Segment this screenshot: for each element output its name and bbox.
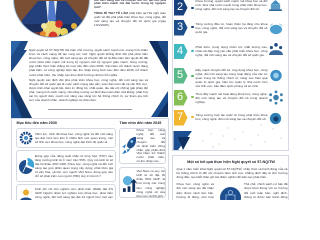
text: vision 1: chuyển đổi: [136, 140, 165, 144]
icon: network nodes: [269, 90, 283, 104]
icon: globe network: [270, 70, 282, 82]
icon: building: [269, 0, 282, 11]
text: vision 1: có thu nhập cao.: [136, 159, 159, 163]
banner: dotted decoration: [174, 124, 282, 150]
text: vision 2: khu vực và thế giới.: [136, 194, 164, 198]
text: goal 1: Tiềm lực, trình độ khoa học, công nghệ và đổi mới sáng tạo đạt mức tiên tiến ở nhiều lĩnh vực quan trọng, một số lĩnh vực khoa học, công nghệ đạt trình độ quốc tế.: [35, 132, 113, 144]
heading: vision to 2045: Tầm nhìn đến năm 2045: [120, 121, 161, 125]
text: vision 2: tâm công nghiệp: [136, 186, 165, 190]
icon: gear: [20, 132, 32, 144]
text: vision 2: công nghệ số của: [136, 190, 165, 194]
text: item 5: Đẩy mạnh chuyển đổi số, ứng dụng khoa học, công nghệ, đổi mới sáng tạo trong hoạt động của các cơ quan trong hệ thống chính trị; nâng cao hiệu quả quản trị quốc gia, hiệu lực quản lý nhà nước trên các lĩnh vực, bảo đảm quốc phòng và an ninh.: [196, 68, 268, 88]
item 4: [174, 43, 283, 59]
text: results intro: Qua 1 năm triển khai Nghị quyết số 57-NQ/TW, nhận thức và hành động của cả hệ thống chính trị đối với chuyển biến tích cực, khẳng định đây là chủ trương đúng đắn, tạo khởi thảo gỡ các điểm nghẽn để kiến tạo phát triển.: [176, 166, 288, 179]
text: vision 1: chắc, góp phần đưa: [136, 148, 165, 152]
text: vision 2: kinh tế số đạt tối: [136, 173, 165, 177]
panel: seven key tasks: [172, 0, 289, 150]
decoration: left blue triangles: [11, 41, 32, 118]
text: item 6: Thúc đẩy mạnh mẽ hoạt động khoa học, công nghệ, đổi mới sáng tạo và chuyển đổi số trong doanh nghiệp.: [196, 92, 268, 104]
card: vision 1: [119, 128, 166, 164]
decoration: right blue triangles: [149, 41, 168, 117]
item 4: 4: [177, 44, 183, 56]
panel: results of implementing the resolution: [172, 154, 289, 204]
heading: results: Một số kết quả thực hiện Nghị quyết số 57-NQ/TW: [187, 160, 275, 164]
icon: growth chart: [122, 176, 137, 192]
item 5: 5: [177, 69, 183, 81]
text: item 7: Tăng cường hợp tác quốc tế trong phát triển khoa học, công nghệ, đổi mới sáng tạo và chuyển đổi số.: [196, 113, 268, 121]
text: item 4: Phát triển, trọng dụng nhân lực chất lượng cao, nhân tài đáp ứng yêu cầu phát triển khoa học, công nghệ, đổi mới sáng tạo và chuyển đổi số quốc gia.: [196, 44, 268, 57]
item 6: [174, 90, 283, 106]
icon: central blue circle: [220, 187, 241, 200]
text: vision 2: Việt Nam có quy mô: [136, 169, 165, 173]
icon: cloud: [270, 24, 282, 34]
text: vision 2: một trong các trung: [136, 181, 165, 185]
card: vision 3: [119, 200, 166, 208]
text: vision 1: Việt Nam trở thành: [136, 151, 165, 155]
icon: light bulb: [20, 188, 32, 200]
icon: team: [269, 43, 283, 55]
card: goal 2: [16, 150, 116, 182]
item 7: 7: [177, 111, 183, 123]
text: vision 2: [136, 169, 165, 198]
text: vision 2: thiểu 50% GDP; là: [136, 177, 165, 181]
item 3: 3: [177, 21, 183, 33]
text: vision 1: nghệ, đổi mới: [136, 132, 165, 136]
card: vision 2: [119, 166, 166, 198]
item 6: 6: [177, 91, 183, 103]
item 5: [174, 68, 282, 88]
item 2: 2: [177, 1, 183, 13]
text: vision 1: sáng tạo và: [136, 136, 165, 140]
text: item 3: Tăng cường đầu tư, hoàn thiện hạ tầng cho khoa học, công nghệ, đổi mới sáng tạo và chuyển đổi số quốc gia.: [196, 22, 268, 34]
panel: main introduction: [11, 40, 168, 117]
item 3: [174, 20, 282, 36]
text: vision 1: nước phát triển,: [136, 155, 165, 159]
text: vision 1: Khoa học, công: [136, 128, 165, 132]
item 7: [174, 110, 282, 126]
item 2: [174, 0, 282, 16]
icon: pie chart: [19, 158, 34, 174]
text block: introduction paragraphs: Nghị quyết số 57-NQ/TW thể hiện chủ trương, quyết sách mạnh mẽ, mang tính chiến lược và cách mạng để tạo xung lực mới. Nghị quyết khẳng định đột phá phát triển khoa học, công nghệ, đổi mới sáng tạo và chuyển đổi số là điều kiện tiên quyết để đất nước phát triển mạnh mẽ trong kỷ nguyên mới kỷ nguyên giàu mạnh, hùng cường; góp phần thực hiện thắng lợi mục tiêu đến năm 2030, Việt Nam trở thành nước đang phát triển, có công nghiệp hiện đại, thu nhập trung bình cao; đến năm 2045, trở thành nước phát triển, thu nhập cao theo định hướng xã hội chủ nghĩa. Nghị quyết xác định đột phá phát triển khoa học, công nghệ, đổi mới sáng tạo và chuyển đổi số quốc gia là cuộc cách mạng sâu sắc, toàn diện trên tất cả các lĩnh vực, được triển khai quyết liệt, kiên trì, đồng bộ, nhất quán, lâu dài với những giải pháp đột phá, mang tính cách mạng; cần tăng cường sự lãnh đạo toàn diện của Đảng, phát huy vai trò người dân, mạnh mẽ nâng cao năng lực hệ thống chính trị, sự tham gia tích cực của doanh nhân, doanh nghiệp và nhân dân.: [29, 48, 148, 102]
icon: globe and gear: [270, 112, 282, 124]
heading: goals to 2030: Mục tiêu đến năm 2030: [16, 121, 57, 125]
card: goal 3: [16, 184, 116, 206]
text: vision 1: số phát triển vững: [136, 144, 165, 148]
panel: goals and vision: [11, 118, 168, 204]
card: goal 1: [16, 128, 116, 148]
text: goal 2: Đóng góp của năng suất nhân tố tổng hợp (TFP) vào tăng trưởng kinh tế ở mức trên 55%. Quy mô kinh tế số đạt tối thiểu 30% GDP. Khoa học, công nghệ và đổi mới sáng tạo góp phần quan trọng xây dựng, phát triển giá trị văn hóa, xã hội, con người Việt Nam, đóng góp vào chỉ số phát triển con người (HDI) duy trì trên 0,7.: [35, 154, 113, 178]
text: vision 1: [136, 128, 165, 163]
icon: rocket: [122, 136, 136, 154]
portrait photo circle: [12, 0, 90, 38]
